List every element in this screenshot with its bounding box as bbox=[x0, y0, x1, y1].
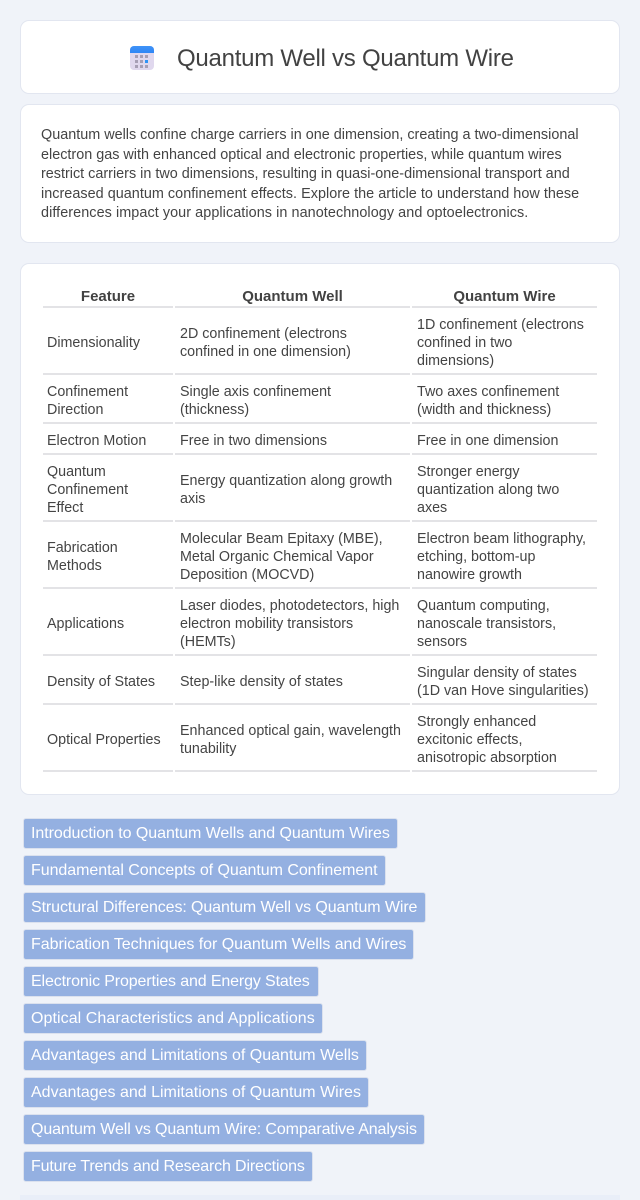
comparison table: Confinement bbox=[47, 384, 128, 400]
intro paragraph: Quantum wells confine charge carriers in one dimension, creating a two-dimensional bbox=[41, 127, 579, 143]
topic link bbox=[23, 1040, 367, 1071]
comparison table: Strongly enhanced bbox=[417, 714, 536, 730]
panel: introduction bbox=[20, 104, 620, 243]
topic link: Electronic Properties and Energy States bbox=[31, 973, 310, 990]
title: Quantum Well vs Quantum Wire bbox=[177, 45, 514, 72]
intro paragraph: restrict carriers in two dimensions, resulting in quasi-one-dimensional transport and bbox=[41, 166, 570, 182]
topic link: Advantages and Limitations of Quantum Wires bbox=[31, 1084, 361, 1101]
comparison table: Optical Properties bbox=[47, 732, 161, 748]
comparison table: Fabrication bbox=[47, 540, 118, 556]
panel: comparison table bbox=[20, 263, 620, 795]
comparison table: (thickness) bbox=[180, 402, 249, 418]
comparison table: excitonic effects, bbox=[417, 732, 522, 748]
comparison table: Electron beam lithography, bbox=[417, 531, 586, 547]
comparison table: (1D van Hove singularities) bbox=[417, 683, 589, 699]
comparison table: Singular density of states bbox=[417, 665, 577, 681]
comparison table: (width and thickness) bbox=[417, 402, 551, 418]
comparison table: Energy quantization along growth bbox=[180, 473, 392, 489]
table header: feature: Feature bbox=[81, 288, 135, 305]
topic link bbox=[23, 929, 414, 960]
comparison table: Dimensionality bbox=[47, 335, 140, 351]
intro paragraph: increased quantum confinement effects. Explore the article to understand how these bbox=[41, 186, 579, 202]
comparison table: Enhanced optical gain, wavelength bbox=[180, 723, 401, 739]
comparison table: Step-like density of states bbox=[180, 674, 343, 690]
intro paragraph bbox=[41, 127, 579, 221]
comparison table: Free in one dimension bbox=[417, 433, 558, 449]
topic link bbox=[23, 1003, 323, 1034]
comparison table: Methods bbox=[47, 558, 102, 574]
topic link: Quantum Well vs Quantum Wire: Comparative Analysis bbox=[31, 1121, 417, 1138]
icon: calendar bbox=[130, 46, 154, 70]
comparison table: Applications bbox=[47, 616, 124, 632]
comparison table bbox=[43, 288, 597, 772]
comparison table: anisotropic absorption bbox=[417, 750, 557, 766]
comparison table: Quantum bbox=[47, 464, 106, 480]
topic link bbox=[23, 818, 398, 849]
topic link: Structural Differences: Quantum Well vs Quantum Wire bbox=[31, 899, 417, 916]
topic link: Introduction to Quantum Wells and Quantum Wires bbox=[31, 825, 390, 842]
comparison table: etching, bottom-up bbox=[417, 549, 535, 565]
comparison table: Density of States bbox=[47, 674, 155, 690]
comparison table: Stronger energy bbox=[417, 464, 520, 480]
comparison table: Molecular Beam Epitaxy (MBE), bbox=[180, 531, 383, 547]
topic link bbox=[23, 1151, 313, 1182]
comparison table: Metal Organic Chemical Vapor bbox=[180, 549, 374, 565]
comparison table: Deposition (MOCVD) bbox=[180, 567, 314, 583]
comparison table: confined in two bbox=[417, 335, 512, 351]
comparison table: Single axis confinement bbox=[180, 384, 331, 400]
comparison table: Laser diodes, photodetectors, high bbox=[180, 598, 399, 614]
comparison table: Effect bbox=[47, 500, 83, 516]
comparison table: electron mobility transistors bbox=[180, 616, 353, 632]
topic link: Fabrication Techniques for Quantum Wells and Wires bbox=[31, 936, 406, 953]
comparison table: dimensions) bbox=[417, 353, 494, 369]
topic link: Future Trends and Research Directions bbox=[31, 1158, 305, 1175]
comparison table: nanoscale transistors, bbox=[417, 616, 556, 632]
comparison table: axis bbox=[180, 491, 205, 507]
comparison table: (HEMTs) bbox=[180, 634, 236, 650]
table header: quantum well: Quantum Well bbox=[242, 288, 343, 305]
topic link bbox=[23, 966, 319, 997]
comparison table: 2D confinement (electrons bbox=[180, 326, 347, 342]
topic link: Optical Characteristics and Applications bbox=[31, 1010, 315, 1027]
comparison table: Quantum computing, bbox=[417, 598, 550, 614]
topic link: Fundamental Concepts of Quantum Confinement bbox=[31, 862, 378, 879]
comparison table: confined in one dimension) bbox=[180, 344, 351, 360]
comparison table: Confinement bbox=[47, 482, 128, 498]
comparison table: sensors bbox=[417, 634, 467, 650]
comparison table: axes bbox=[417, 500, 447, 516]
topic link list bbox=[23, 818, 426, 1182]
comparison table: Electron Motion bbox=[47, 433, 146, 449]
comparison table: Direction bbox=[47, 402, 103, 418]
comparison table: Free in two dimensions bbox=[180, 433, 327, 449]
panel: title header bbox=[20, 20, 620, 94]
comparison table: Two axes confinement bbox=[417, 384, 559, 400]
topic link bbox=[23, 1077, 369, 1108]
intro paragraph: electron gas with enhanced optical and electronic properties, while quantum wires bbox=[41, 146, 562, 162]
topic link bbox=[23, 892, 426, 923]
footer strip bbox=[20, 1195, 620, 1200]
comparison table: quantization along two bbox=[417, 482, 559, 498]
topic link bbox=[23, 855, 386, 886]
topic link: Advantages and Limitations of Quantum Wells bbox=[31, 1047, 359, 1064]
comparison table: tunability bbox=[180, 741, 236, 757]
comparison table: nanowire growth bbox=[417, 567, 522, 583]
intro paragraph: differences impact your applications in nanotechnology and optoelectronics. bbox=[41, 205, 528, 221]
table header: quantum wire: Quantum Wire bbox=[453, 288, 556, 305]
comparison table: 1D confinement (electrons bbox=[417, 317, 584, 333]
topic link bbox=[23, 1114, 425, 1145]
